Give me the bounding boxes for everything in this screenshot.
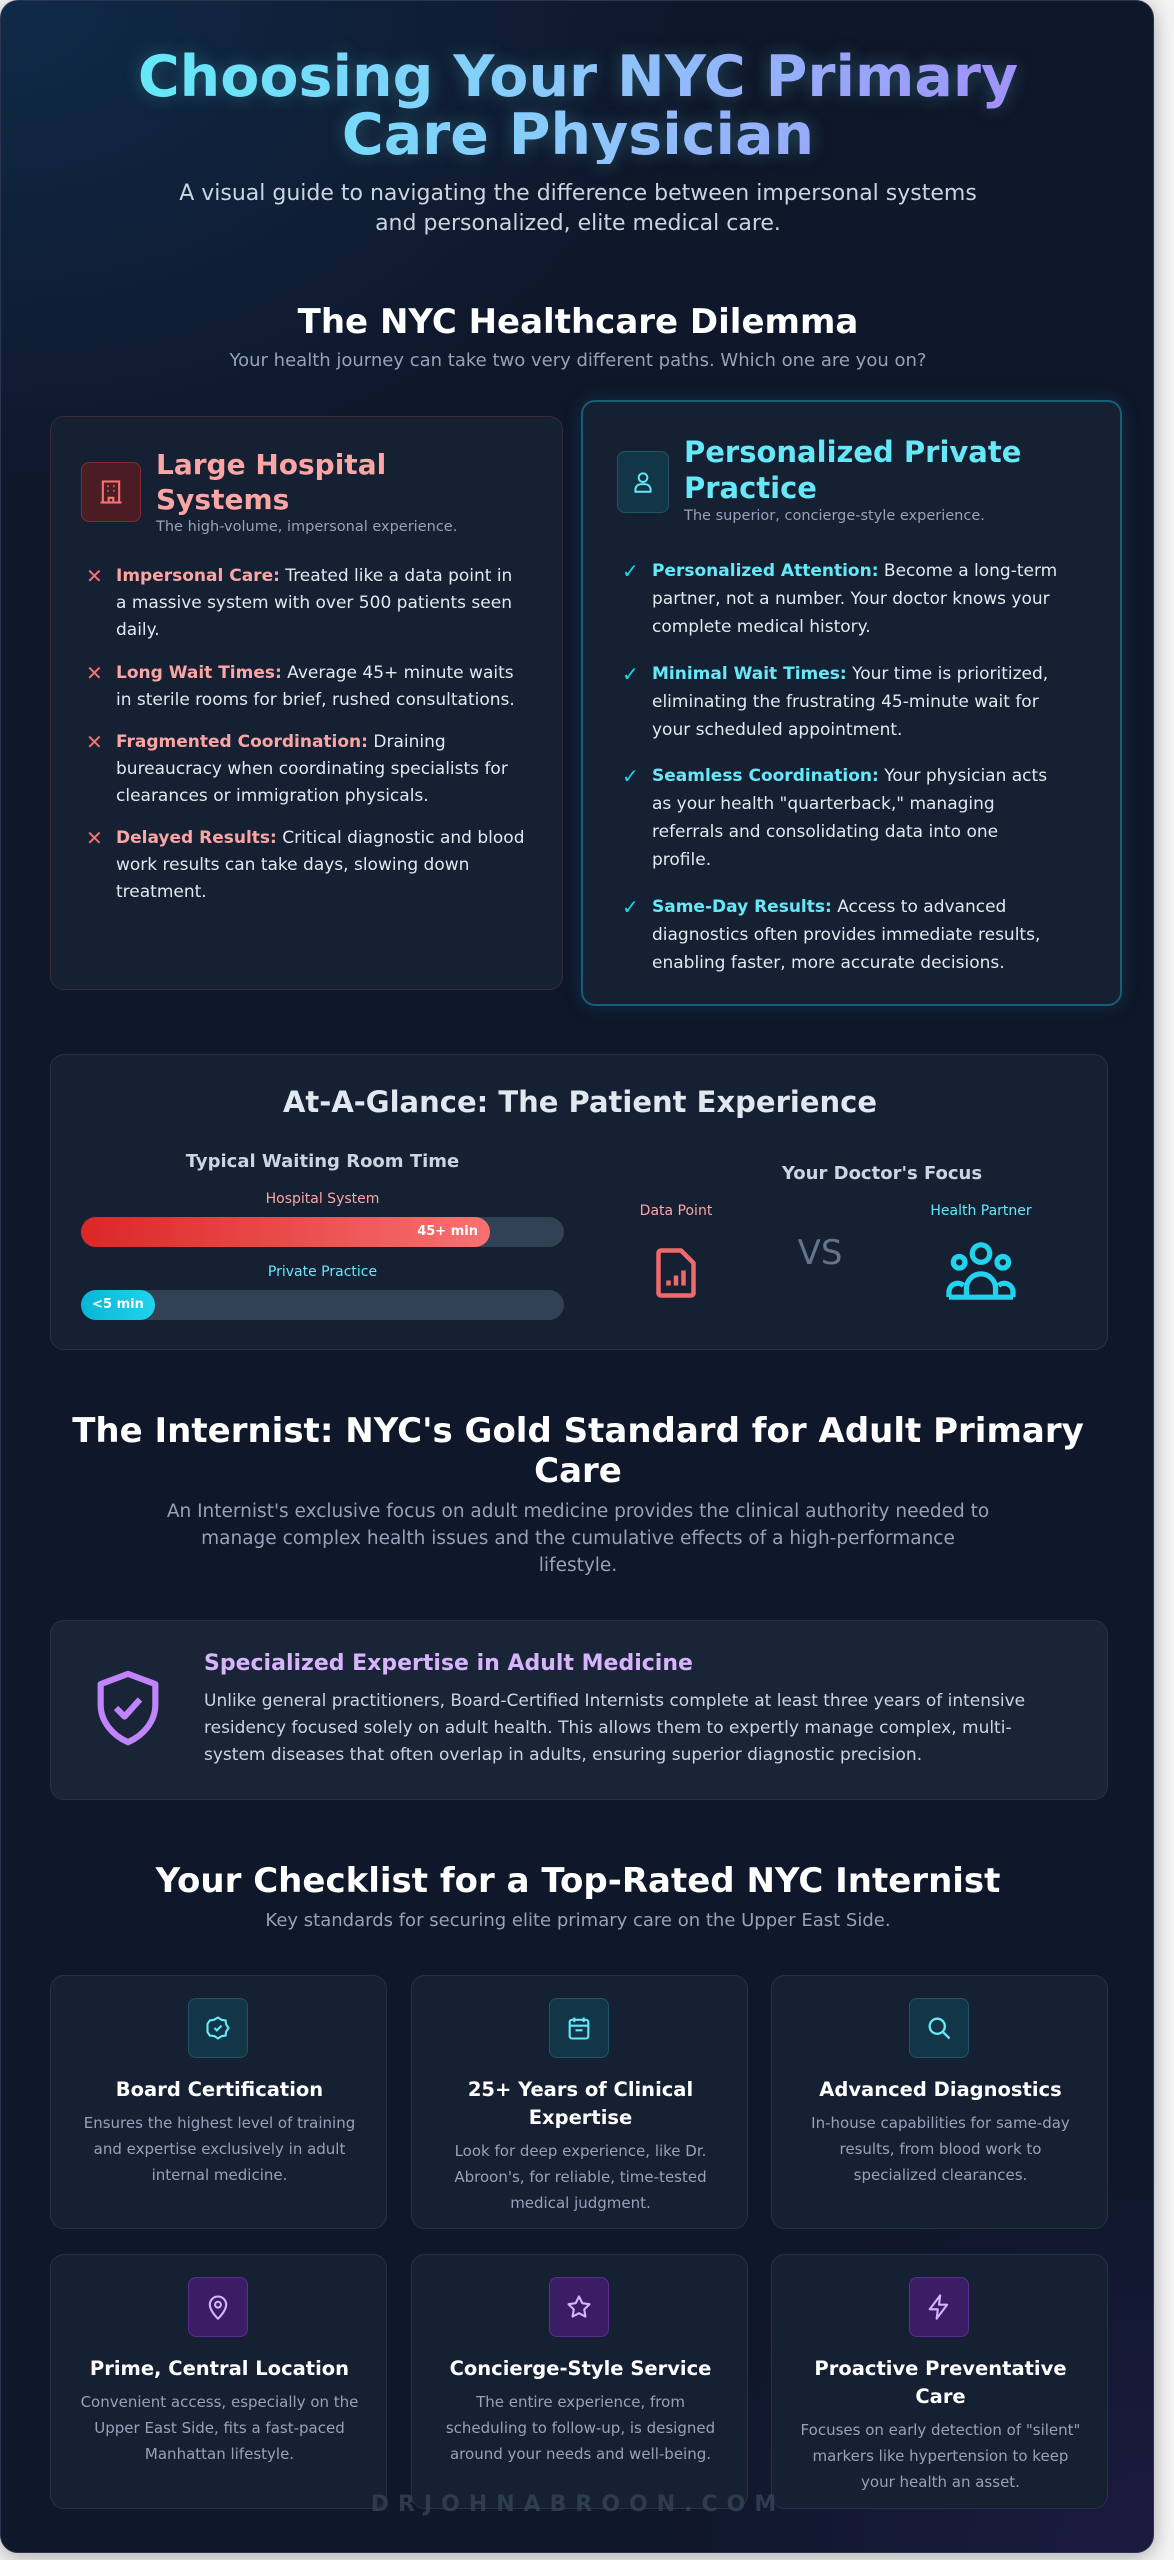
checklist subtitle: Key standards for securing elite primary care on the Upper East Side. [265, 1910, 891, 1931]
bar chart: waiting time: 45+ min [417, 1224, 478, 1239]
card: concierge service [411, 2254, 748, 2509]
icon: magnifier [909, 1998, 969, 2058]
card: concierge service: Concierge-Style Service [450, 2357, 711, 2380]
panel title [156, 448, 386, 516]
list: private practice benefits: Same-Day Results: Access to advanced diagnostics often provides immediate results, enabling faster, more accurate decisions. [652, 897, 1040, 973]
panel: personalized private practice: ✓ [622, 662, 639, 686]
glance title: At-A-Glance: The Patient Experience [283, 1085, 877, 1119]
card: location: Prime, Central Location [90, 2357, 349, 2380]
panel title: Practice [684, 471, 817, 505]
panel: large hospital systems: ✕ [86, 826, 103, 850]
doctor's focus comparison: Your Doctor's Focus [782, 1163, 982, 1184]
list: private practice benefits: Seamless Coordination: Your physician acts as your health "quarterback," managing referrals and consolidating data into one profile. [652, 766, 1047, 870]
icon: calendar [549, 1998, 609, 2058]
doctor's focus comparison: Health Partner [930, 1203, 1032, 1219]
card: 25+ years: Look for deep experience, like Dr. Abroon's, for reliable, time-tested medical judgment. [454, 2142, 707, 2212]
list: hospital drawbacks: Fragmented Coordination: Draining bureaucracy when coordinating specialists for clearances or immigration physicals. [116, 732, 508, 806]
internist paragraph [167, 1501, 989, 1576]
list: private practice benefits [622, 559, 1057, 973]
panel: at-a-glance [50, 1054, 1108, 1350]
list: hospital drawbacks: Impersonal Care: Treated like a data point in [116, 566, 512, 586]
card: location: Convenient access, especially on the Upper East Side, fits a fast-paced Manhattan lifestyle. [81, 2393, 358, 2463]
icon: star [549, 2277, 609, 2337]
bar chart: waiting time: <5 min [92, 1297, 144, 1312]
expertise title: Specialized Expertise in Adult Medicine [204, 1651, 693, 1676]
list: hospital drawbacks: Delayed Results: Critical diagnostic and blood work results can take days, slowing down treatment. [116, 828, 524, 902]
internist paragraph: lifestyle. [539, 1555, 617, 1576]
subtitle: A visual guide to navigating the difference between impersonal systems and personalized, elite medical care. [179, 181, 977, 236]
panel: large hospital systems [50, 416, 563, 990]
card: concierge service: The entire experience, from scheduling to follow-up, is designed around your needs and well-being. [446, 2393, 715, 2463]
panel: large hospital systems: ✕ [86, 661, 103, 685]
card: preventative care: Focuses on early detection of "silent" markers like hypertension to keep your health an asset. [801, 2421, 1080, 2491]
icon: shield check [98, 1670, 158, 1746]
panel title [684, 435, 1021, 505]
panel: specialized expertise [50, 1620, 1108, 1800]
panel: personalized private practice: ✓ [622, 559, 639, 583]
panel: personalized private practice [581, 400, 1122, 1006]
title: Care Physician [342, 102, 814, 168]
heading: checklist: Your Checklist for a Top-Rated NYC Internist [156, 1861, 1000, 1901]
list: private practice benefits: Personalized Attention: Become a long-term partner, not a number. Your doctor knows your complete medical history. [652, 561, 1057, 637]
list: hospital drawbacks: a massive system with over 500 patients seen [116, 593, 512, 613]
heading: internist: The Internist: NYC's Gold Standard for Adult Primary Care [72, 1411, 1084, 1491]
doctor's focus comparison [640, 1163, 1032, 1300]
panel: large hospital systems: ✕ [86, 730, 103, 754]
icon: map pin [188, 2277, 248, 2337]
expertise body: Unlike general practitioners, Board-Certified Internists complete at least three years of intensive residency focused solely on adult health. This allows them to expertly manage complex, multi-system diseases that often overlap in adults, ensuring superior diagnostic precision. [204, 1691, 1025, 1765]
panel: personalized private practice: ✓ [622, 764, 639, 788]
card: preventative care: Proactive Preventative Care [814, 2357, 1067, 2408]
vs label: VS [798, 1233, 842, 1273]
panel: large hospital systems: ✕ [86, 564, 103, 588]
card: location [50, 2254, 387, 2509]
card: board certification: Board Certification [116, 2078, 323, 2101]
panel title: Large Hospital [156, 448, 386, 481]
card: 25+ years [411, 1975, 748, 2229]
panel title: Personalized Private [684, 435, 1021, 469]
bar chart: waiting time: Private Practice [268, 1264, 377, 1280]
internist paragraph: An Internist's exclusive focus on adult medicine provides the clinical authority needed to [167, 1501, 989, 1522]
card: preventative care [771, 2254, 1108, 2509]
list: private practice benefits: Minimal Wait Times: Your time is prioritized, eliminating the frustrating 45-minute wait for your scheduled appointment. [652, 664, 1048, 740]
panel subtitle: The superior, concierge-style experience. [684, 508, 985, 524]
bar chart: waiting time [81, 1151, 564, 1320]
title [61, 48, 1095, 164]
panel subtitle: The high-volume, impersonal experience. [156, 519, 457, 535]
card: advanced diagnostics [771, 1975, 1108, 2229]
list: hospital drawbacks: daily. [116, 620, 160, 640]
internist paragraph: manage complex health issues and the cumulative effects of a high-performance [201, 1528, 955, 1549]
dilemma subtitle: Your health journey can take two very different paths. Which one are you on? [230, 350, 926, 371]
icon: document chart [656, 1248, 696, 1298]
bar chart: waiting time: Typical Waiting Room Time [186, 1151, 459, 1172]
card: advanced diagnostics: Advanced Diagnostics [819, 2078, 1062, 2101]
icon: person [617, 451, 669, 513]
card: advanced diagnostics: In-house capabilities for same-day results, from blood work to specialized clearances. [811, 2114, 1070, 2184]
heading: dilemma: The NYC Healthcare Dilemma [298, 302, 858, 342]
watermark: DRJOHNABROON.COM [371, 2492, 785, 2517]
doctor's focus comparison: Data Point [640, 1203, 712, 1219]
card: board certification: Ensures the highest level of training and expertise exclusively in adult internal medicine. [84, 2114, 355, 2184]
card: 25+ years: 25+ Years of Clinical Expertise [468, 2078, 693, 2129]
icon: people group [946, 1242, 1016, 1300]
icon: hospital building [81, 462, 141, 522]
bar chart: waiting time: Hospital System [266, 1191, 379, 1207]
title: Choosing Your NYC Primary [138, 44, 1018, 110]
list: hospital drawbacks: Long Wait Times: Average 45+ minute waits in sterile rooms for brief, rushed consultations. [116, 663, 515, 710]
icon: lightning [909, 2277, 969, 2337]
list: hospital drawbacks [86, 564, 524, 902]
panel title: Systems [156, 483, 289, 516]
icon: badge check [188, 1998, 248, 2058]
card: board certification [50, 1975, 387, 2229]
panel: personalized private practice: ✓ [622, 895, 639, 919]
